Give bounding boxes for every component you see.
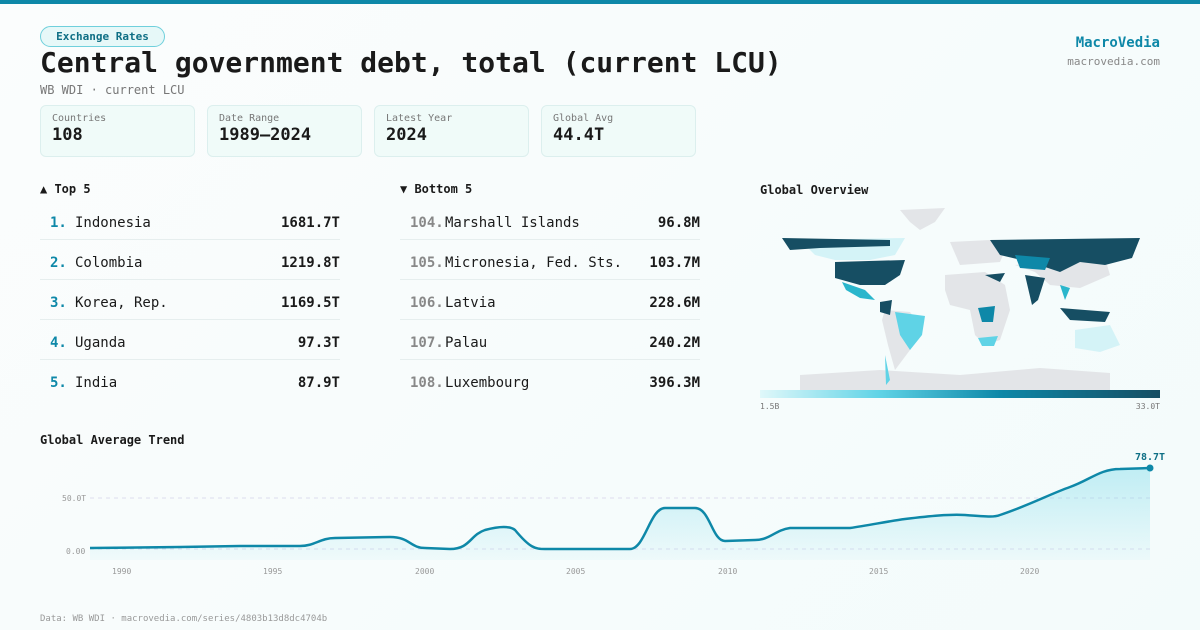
panel: top 5: 2. <box>50 255 67 271</box>
line chart: 2010 <box>718 567 737 576</box>
card: global avg: 44.4T <box>553 125 604 145</box>
panel: bottom 5: 105. <box>410 255 444 271</box>
map <box>782 208 1140 390</box>
panel: top 5: 3. <box>50 295 67 311</box>
panel: top 5: Indonesia <box>75 215 151 231</box>
panel: top 5: 5. <box>50 375 67 391</box>
card: latest year: 2024 <box>386 125 427 145</box>
card: global avg: Global Avg <box>553 113 613 124</box>
india <box>1025 275 1045 305</box>
subtitle: WB WDI · current LCU <box>40 83 184 97</box>
panel: bottom 5: 106. <box>410 295 444 311</box>
legend labels: 33.0T <box>1136 402 1160 411</box>
line chart: 78.7T <box>1135 452 1165 463</box>
brand <box>1067 35 1160 68</box>
panel: bottom 5: 96.8M <box>658 215 700 231</box>
kazakhstan <box>1015 255 1050 270</box>
top bar <box>0 0 1200 4</box>
card: countries: Countries <box>52 113 106 124</box>
panel: bottom 5: 103.7M <box>649 255 700 271</box>
brand: macrovedia.com <box>1067 55 1160 68</box>
usa <box>835 260 905 285</box>
panel: top 5 <box>40 182 340 391</box>
panel: top 5: India <box>75 375 117 391</box>
panel: bottom 5: ▼ Bottom 5 <box>400 182 472 196</box>
australia <box>1075 325 1120 352</box>
heading: trend: Global Average Trend <box>40 433 184 447</box>
brand: MacroVedia <box>1076 35 1160 51</box>
card: date range: 1989–2024 <box>219 125 311 145</box>
panel: bottom 5: Luxembourg <box>445 375 529 391</box>
footer: Data: WB WDI · macrovedia.com/series/4803b13d8dc4704b <box>40 614 327 624</box>
card: latest year: Latest Year <box>386 113 452 124</box>
card: latest year <box>374 105 529 157</box>
line chart: 1990 <box>112 567 131 576</box>
card: global avg <box>541 105 696 157</box>
line chart: 50.0T <box>62 494 86 503</box>
line chart: 2015 <box>869 567 888 576</box>
panel: top 5: 1219.8T <box>281 255 340 271</box>
middle east <box>985 273 1005 282</box>
panel: bottom 5: 108. <box>410 375 444 391</box>
canada <box>800 238 905 260</box>
south africa <box>978 336 998 346</box>
card: countries <box>40 105 195 157</box>
title: Central government debt, total (current LCU) <box>40 46 782 79</box>
panel: top 5: Colombia <box>75 255 142 271</box>
legend labels <box>760 402 1160 411</box>
panel: top 5: 87.9T <box>298 375 340 391</box>
panel: bottom 5: Micronesia, Fed. Sts. <box>445 255 622 271</box>
brazil <box>895 312 925 350</box>
panel: top 5: Korea, Rep. <box>75 295 168 311</box>
panel: top 5: 1169.5T <box>281 295 340 311</box>
panel: top 5: 1. <box>50 215 67 231</box>
russia <box>990 238 1140 272</box>
tag: Exchange Rates: Exchange Rates <box>56 30 149 43</box>
card: date range: Date Range <box>219 113 279 124</box>
panel: bottom 5: 107. <box>410 335 444 351</box>
line chart: 1995 <box>263 567 282 576</box>
panel: top 5: 4. <box>50 335 67 351</box>
indonesia <box>1060 308 1110 322</box>
panel: bottom 5: 240.2M <box>649 335 700 351</box>
SE asia <box>1060 285 1070 300</box>
panel: bottom 5: 104. <box>410 215 444 231</box>
line chart: 2005 <box>566 567 585 576</box>
congo <box>978 306 995 322</box>
tag: Exchange Rates <box>40 26 165 47</box>
alaska/north band <box>782 238 890 250</box>
heading: global overview: Global Overview <box>760 183 868 197</box>
panel: bottom 5: 396.3M <box>649 375 700 391</box>
card: countries: 108 <box>52 125 83 145</box>
card: date range <box>207 105 362 157</box>
line chart: 0.00 <box>66 547 85 556</box>
panel: top 5: ▲ Top 5 <box>40 182 91 196</box>
line chart: 2020 <box>1020 567 1039 576</box>
line chart: 2000 <box>415 567 434 576</box>
colombia <box>880 300 892 315</box>
panel: top 5: 97.3T <box>298 335 340 351</box>
legend gradient <box>760 390 1160 398</box>
mexico <box>842 282 875 300</box>
line chart <box>62 452 1165 576</box>
panel: bottom 5: Marshall Islands <box>445 215 580 231</box>
panel: bottom 5: Palau <box>445 335 487 351</box>
panel: bottom 5: 228.6M <box>649 295 700 311</box>
panel: bottom 5 <box>400 182 700 391</box>
legend labels: 1.5B <box>760 402 779 411</box>
stat cards <box>40 105 696 157</box>
panel: top 5: Uganda <box>75 335 126 351</box>
panel: bottom 5: Latvia <box>445 295 496 311</box>
panel: top 5: 1681.7T <box>281 215 340 231</box>
